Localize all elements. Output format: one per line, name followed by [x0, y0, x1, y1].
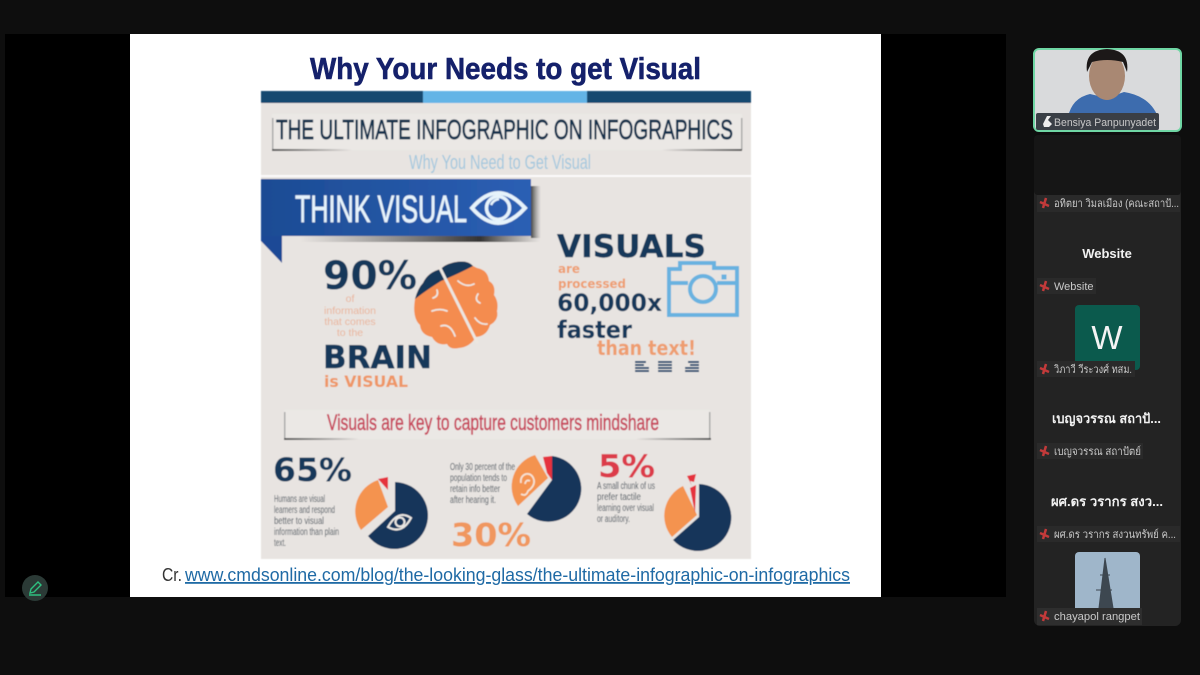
tile: chayapol rangpet [1037, 552, 1142, 625]
tile: Website: Website [1054, 281, 1094, 293]
icon: brain [414, 262, 498, 348]
tile: W avatar [1037, 305, 1140, 377]
stat: 65%: 65% [273, 451, 352, 489]
tile: participant 4 [1037, 411, 1161, 459]
think visual banner: THINK VISUAL [295, 189, 467, 231]
tile: chayapol rangpet: chayapol rangpet [1054, 611, 1140, 623]
brain stat: is VISUAL [324, 372, 408, 391]
visuals stat: faster [557, 316, 632, 344]
visuals stat: VISUALS [557, 229, 706, 265]
brain stat: 90% [323, 254, 417, 299]
think visual banner [261, 179, 541, 263]
tile: participant 5 [1037, 494, 1180, 542]
caption: 65%: better to visual [274, 516, 324, 527]
visuals stat: 60,000x [557, 289, 663, 317]
pie chart: 65% [355, 477, 428, 549]
tile: Bensiya Panpunyadet [1034, 49, 1181, 131]
person video [1068, 49, 1158, 117]
caption: 30%: retain info better [450, 484, 500, 495]
title ribbon [272, 114, 742, 151]
tile: W avatar: W [1091, 319, 1123, 356]
caption: 5%: prefer tactile [597, 492, 641, 503]
caption: 30% [450, 462, 515, 506]
caption: 65%: Humans are visual [274, 494, 325, 505]
stat: 30% [450, 455, 581, 554]
caption: 5% [597, 481, 655, 525]
title ribbon: THE ULTIMATE INFOGRAPHIC ON INFOGRAPHICS [276, 114, 733, 145]
slide [130, 34, 881, 597]
caption: 65%: text. [274, 538, 286, 549]
top colour bar [261, 91, 751, 103]
icon: ear [521, 474, 534, 495]
caption: of information: that comes [324, 316, 376, 328]
tile: W avatar: วิภาวี วีระวงศ์ ทสม. [1053, 363, 1132, 376]
caption: 30%: Only 30 percent of the [450, 462, 515, 473]
tower photo [1096, 558, 1113, 608]
tile: participant 4: เบญจวรรณ สถาปัตย์ [1054, 445, 1141, 458]
section ribbon: Visuals are key to capture customers mindshare [327, 410, 659, 435]
annotation pencil button [22, 575, 48, 601]
icon: eye [472, 193, 525, 223]
infographic [261, 91, 751, 559]
visuals stat: are [558, 261, 580, 276]
visuals stat [557, 229, 706, 360]
stat: 30%: 30% [451, 516, 531, 554]
tile: Bensiya Panpunyadet: Bensiya Panpunyadet [1054, 117, 1156, 129]
caption: 65%: learners and respond [274, 505, 335, 516]
caption: 65% [274, 494, 339, 549]
icon: eye in pie [388, 515, 411, 530]
participant sidebar [1034, 49, 1181, 626]
section ribbon [284, 410, 711, 440]
stat: 5%: 5% [598, 449, 655, 485]
caption: 65%: information than plain [274, 527, 339, 538]
stat: 5% [597, 449, 731, 551]
slide title: Why Your Needs to get Visual [310, 51, 701, 86]
tile: participant 4: เบญจวรรณ สถาปั... [1052, 411, 1161, 427]
brain stat [323, 254, 432, 391]
shared screen area [5, 34, 1006, 597]
visuals stat: processed [558, 276, 626, 291]
caption: 30%: population tends to [450, 473, 507, 484]
credit line: Cr. [162, 565, 182, 585]
caption: of information: information [324, 305, 376, 317]
brain stat: BRAIN [323, 340, 432, 376]
caption: 5%: or auditory. [597, 514, 630, 525]
icon: camera [669, 263, 737, 315]
icon: text lines [635, 361, 699, 372]
caption: of information [324, 293, 376, 339]
caption: of information: of [346, 293, 354, 305]
caption: 30%: after hearing it. [450, 495, 496, 506]
stat: 65% [273, 451, 428, 549]
tile: Website: Website [1082, 246, 1132, 261]
tile: participant 2 [1037, 195, 1180, 212]
tile: participant 5: ผศ.ดร วรากร สงว... [1051, 494, 1163, 509]
visuals stat: than text! [597, 336, 696, 360]
subtitle: Why You Need to Get Visual [409, 152, 591, 174]
credit line: www.cmdsonline.com/blog/the-looking-glass/the-ultimate-infographic-on-infographics [184, 565, 850, 585]
caption: 5%: learning over visual [597, 503, 654, 514]
tile: participant 5: ผศ.ดร วรากร สงวนทรัพย์ ค... [1054, 528, 1176, 541]
caption: of information: to the [337, 327, 363, 339]
tile: participant 2: อทิตยา วิมลเมือง (คณะสถาปั... [1054, 197, 1179, 210]
tile: Website [1037, 246, 1132, 294]
caption: 5%: A small chunk of us [597, 481, 655, 492]
pie chart: 30% [512, 455, 581, 522]
pie chart: 5% [664, 474, 731, 551]
